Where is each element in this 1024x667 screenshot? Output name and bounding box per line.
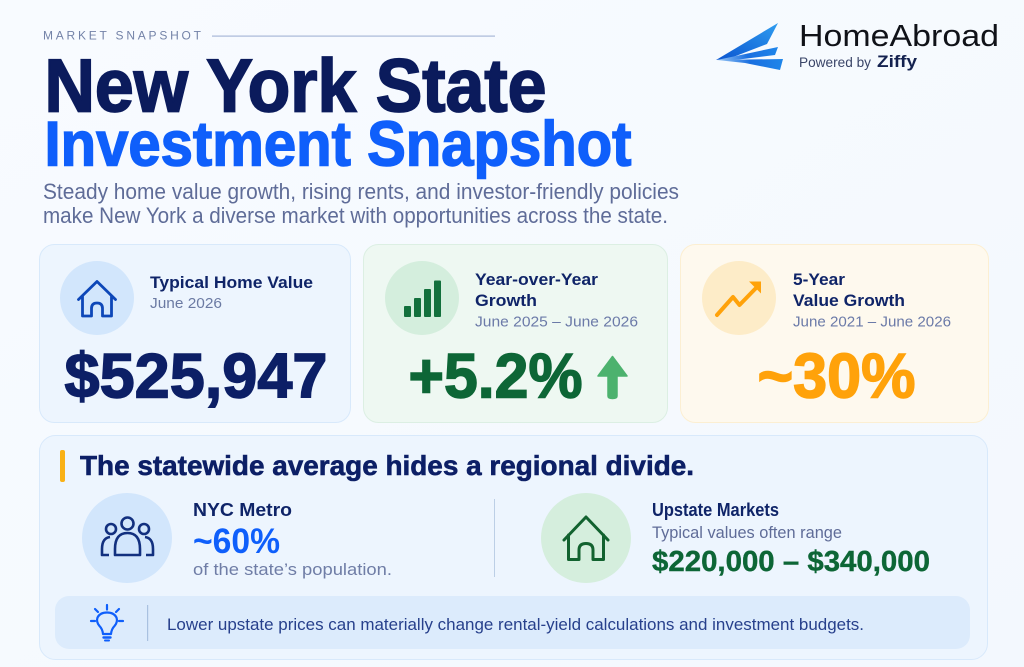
logo: HomeAbroad powered by Ziffy: Ziffy [877,52,918,71]
icon: green house [541,493,631,583]
panel: five-year value growth: ~30% [758,342,916,412]
icon: light bulb [91,605,123,640]
icon: house [60,261,134,335]
text: NYC metro [193,500,392,579]
panel: five-year value growth: 5-Year [793,270,845,289]
icon: up arrow [598,356,627,398]
text: upstate markets: Upstate Markets [652,500,779,520]
heading: The statewide average hides a regional divide. [80,450,694,481]
eyebrow: market snapshot: MARKET SNAPSHOT [43,28,202,42]
icon: bar chart [385,261,459,335]
logo: HomeAbroad powered by Ziffy: Powered by [799,54,871,70]
panel: five-year value growth [680,244,988,422]
title: New York State [44,44,546,128]
title [44,44,632,180]
text: NYC metro: of the state’s population. [193,560,392,579]
logo: HomeAbroad powered by Ziffy [716,18,999,71]
panel: year-over-year growth: June 2025 – June 2026 [475,314,638,330]
text: NYC metro: NYC Metro [193,500,292,520]
subtitle [43,179,679,228]
panel: typical home value: Typical Home Value [150,273,313,292]
logo: HomeAbroad powered by Ziffy: HomeAbroad [799,18,999,53]
panel: five-year value growth: June 2021 – June 2026 [793,314,951,330]
panel: typical home value [40,244,350,422]
panel: year-over-year growth: Growth [475,291,537,310]
icon: trend arrow [702,261,776,335]
callout: upstate prices note: Lower upstate prices can materially change rental-yield calculations and investment budgets. [167,615,864,634]
callout: upstate prices note [55,596,970,649]
text: NYC metro: ~60% [193,522,280,561]
subtitle: Steady home value growth, rising rents, and investor-friendly policies [43,179,679,204]
icon: people [82,493,172,583]
panel: typical home value: June 2026 [150,296,222,312]
title: Investment Snapshot [44,110,632,180]
panel: year-over-year growth: +5.2% [408,342,582,412]
panel: typical home value: $525,947 [64,342,328,412]
heading accent bar [60,450,65,482]
panel: five-year value growth: Value Growth [793,291,905,310]
panel: year-over-year growth: Year-over-Year [475,270,598,289]
panel: year-over-year growth [364,244,668,422]
text: upstate markets: Typical values often range [652,524,842,542]
icon: paper plane wings [716,23,783,70]
text: upstate markets [652,500,930,578]
text: upstate markets: $220,000 – $340,000 [652,546,930,578]
panel: regional divide [40,436,988,660]
subtitle: make New York a diverse market with opportunities across the state. [43,203,668,228]
